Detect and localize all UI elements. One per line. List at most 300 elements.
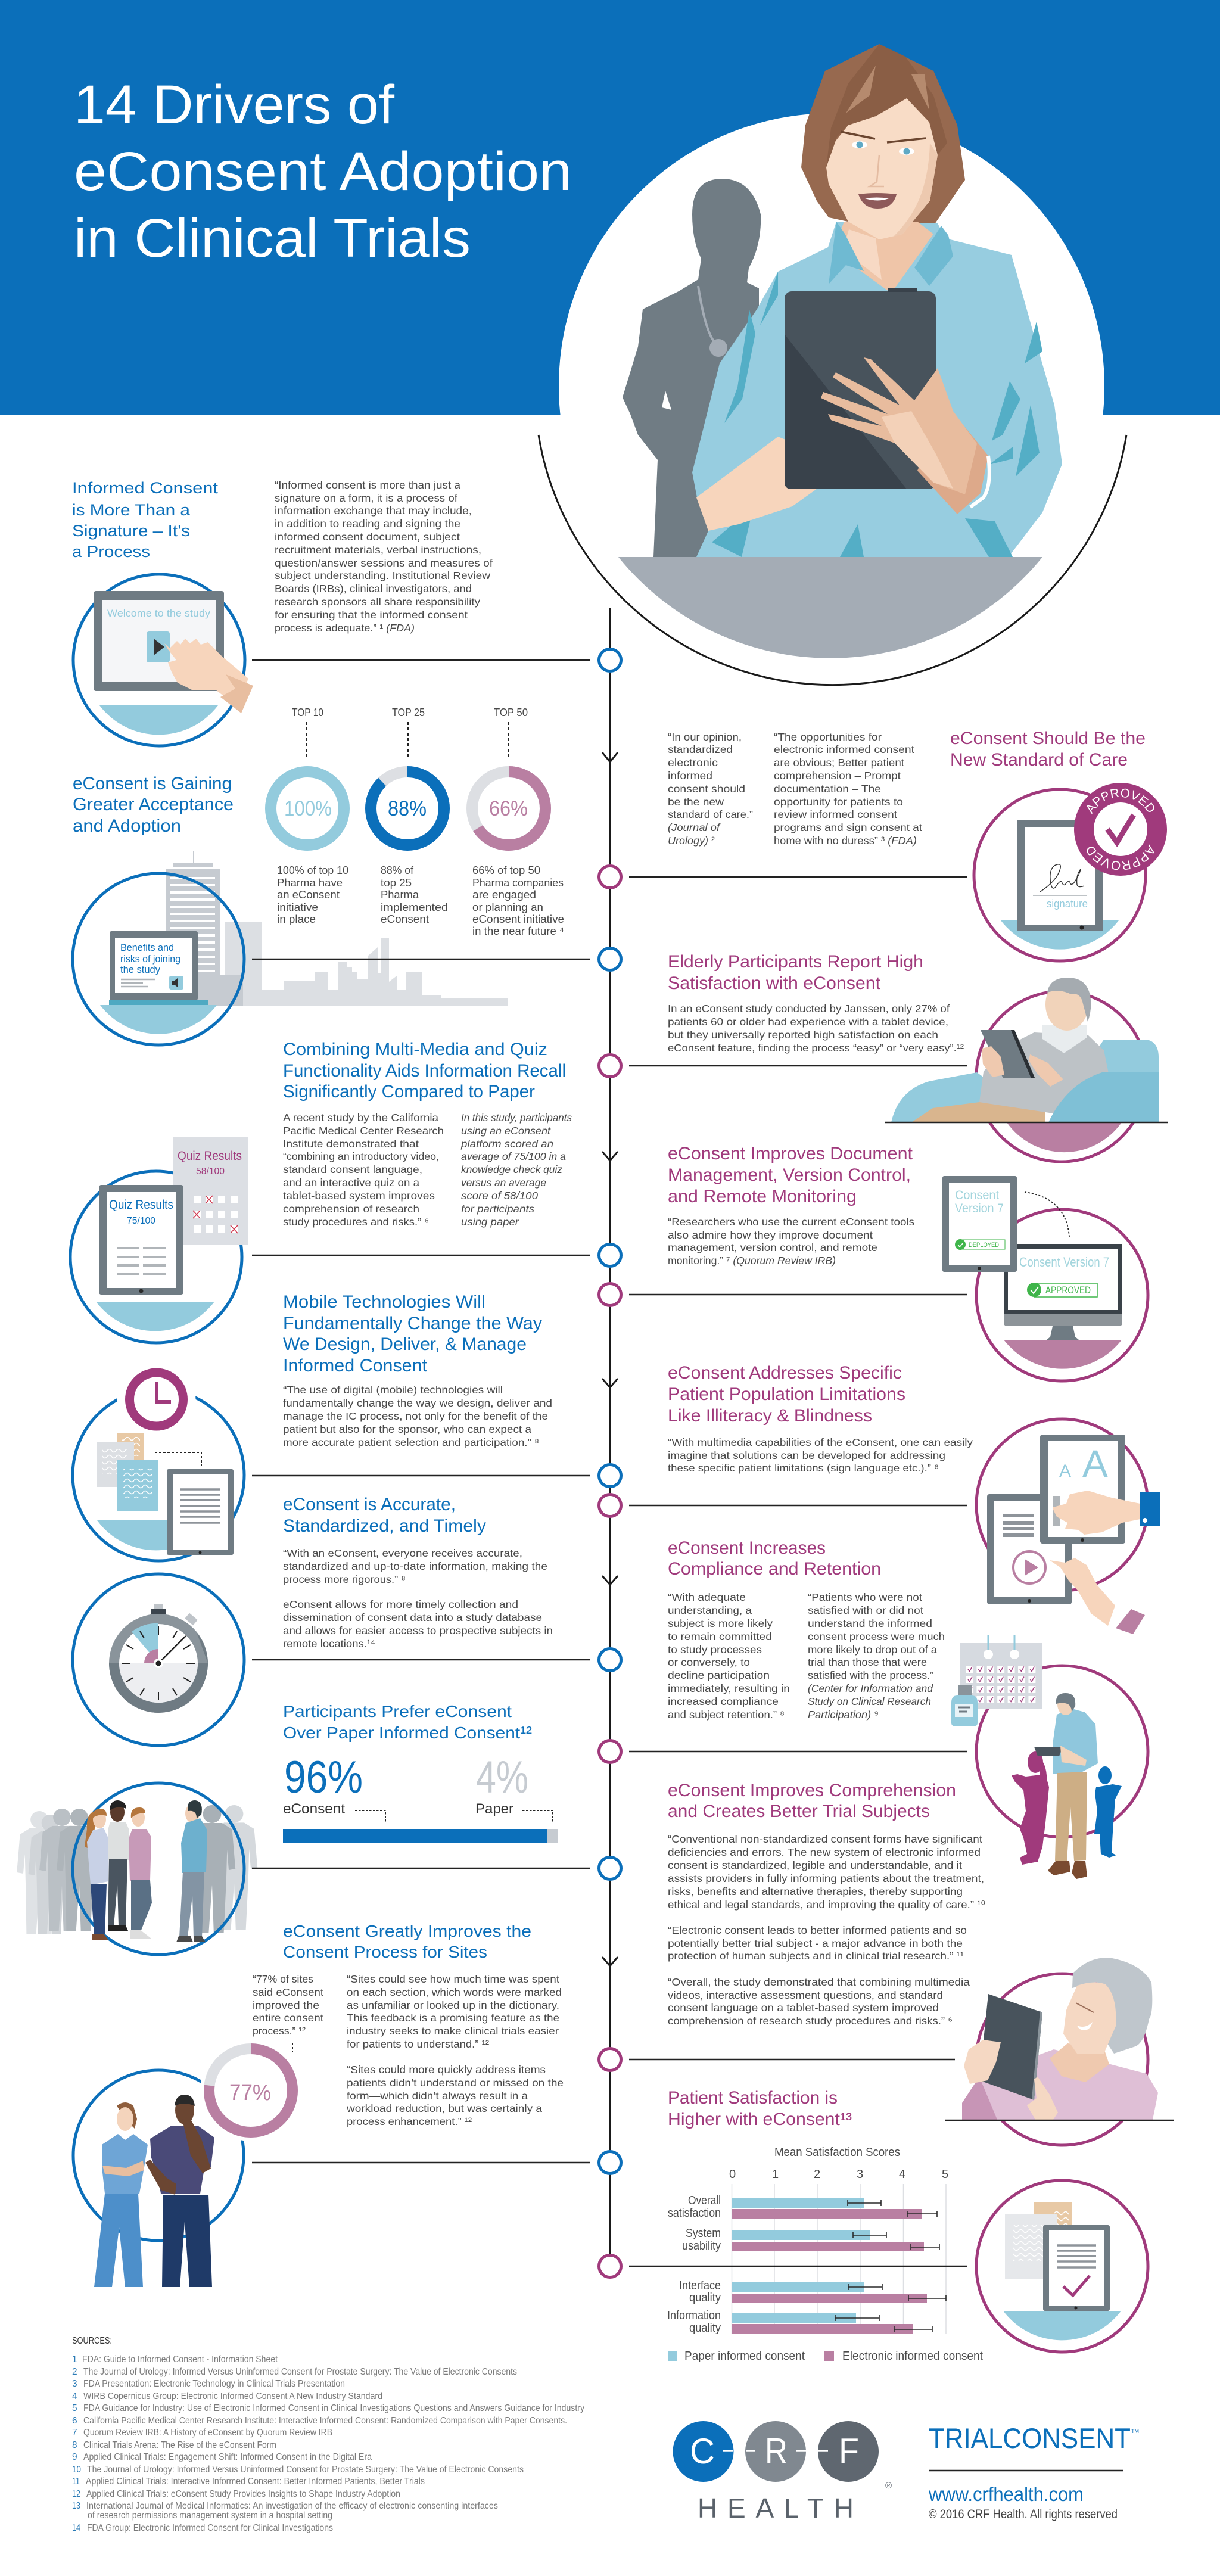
quote column two: Participation) ⁹ <box>808 1709 879 1721</box>
left collar <box>829 222 864 284</box>
heading: eConsent Addresses Specific <box>668 1363 902 1383</box>
panel: gaining acceptance <box>73 707 564 1045</box>
sources list: 14 <box>72 2523 80 2533</box>
heading: Mobile Technologies Will <box>283 1292 485 1312</box>
donut: 100 percent <box>270 772 344 845</box>
quote paragraphs: consent language on a tablet-based system improved <box>668 2002 939 2014</box>
quote column two <box>808 1591 945 1721</box>
donut captions: an eConsent <box>277 888 340 901</box>
node <box>599 2048 621 2071</box>
top labels <box>292 707 528 760</box>
bar chart: mean satisfaction scores: 1 <box>772 2168 779 2181</box>
study text: and an interactive quiz on a <box>283 1177 419 1189</box>
donut captions: or planning an <box>472 901 543 913</box>
77 percent quote: “77% of sites <box>253 1973 313 1985</box>
quote paragraphs: ethical and legal standards, and improving the quality of care.” ¹⁰ <box>668 1899 985 1911</box>
title: in Clinical Trials <box>74 208 471 269</box>
icon: monitor and tablet: Consent <box>955 1189 999 1202</box>
sources list: Clinical Trials Arena: The Rise of the eConsent Form <box>83 2440 276 2450</box>
crowd silhouettes <box>17 1805 257 1934</box>
heading: Signature – It’s <box>72 522 190 540</box>
icon: quiz results: Quiz Results <box>109 1198 173 1212</box>
heading <box>668 1781 956 1821</box>
right iris <box>903 148 910 155</box>
heading: Functionality Aids Information Recall <box>283 1061 566 1081</box>
heading: Patient Population Limitations <box>668 1385 905 1404</box>
icon: quiz results: Quiz Results <box>178 1149 242 1163</box>
hero grey base <box>618 557 1042 658</box>
heading: Greater Acceptance <box>73 795 234 814</box>
heading: Elderly Participants Report High <box>668 952 923 972</box>
quote text: informed consent document, subject <box>275 531 460 543</box>
sources list: 6 <box>72 2416 77 2426</box>
heading <box>668 1363 905 1426</box>
77 percent quote <box>253 1973 323 2054</box>
quote text: information exchange that may include, <box>275 505 472 517</box>
quote paragraphs: deficiencies and errors. The new system of electronic informed <box>668 1846 981 1858</box>
body text: “With an eConsent, everyone receives accurate, <box>283 1547 522 1559</box>
77 percent quote: process.” ¹² <box>253 2025 306 2037</box>
panel: comprehension and better subjects <box>668 1781 1158 2145</box>
sites quotes <box>346 1973 564 2127</box>
quote paragraphs: “Overall, the study demonstrated that combining multimedia <box>668 1976 970 1988</box>
quote column one: “With adequate <box>668 1591 746 1603</box>
body text: patients 60 or older had experience with a tablet device, <box>668 1016 948 1028</box>
study text: standard consent language, <box>283 1163 422 1175</box>
donut: 88 percent: 88% <box>388 797 427 820</box>
eyes and brows <box>841 132 926 142</box>
quote column one: understanding, a <box>668 1604 752 1616</box>
horizontal baseline under older woman <box>945 2120 1174 2121</box>
quote paragraphs: videos, interactive assessment questions, and standard <box>668 1989 943 2001</box>
heading <box>668 2088 852 2129</box>
body text: process more rigorous.” ⁸ <box>283 1573 406 1585</box>
figure: man in grey <box>108 1800 129 1931</box>
donut captions: 100% of top 10 <box>277 864 348 876</box>
body text: eConsent allows for more timely collection and <box>283 1598 518 1610</box>
heading: Participants Prefer eConsent <box>283 1702 512 1721</box>
icon: tablets with hands: A <box>1082 1442 1108 1485</box>
study text: Pacific Medical Center Research <box>283 1125 444 1137</box>
FDA quote: documentation – The <box>774 783 881 795</box>
icon: tablets with hands: A <box>1059 1461 1071 1481</box>
horizontal connector <box>629 1505 967 1506</box>
quote text <box>668 1216 914 1267</box>
icon: signature tablet: signature <box>1047 898 1088 910</box>
bar chart: mean satisfaction scores: Overall <box>688 2194 721 2207</box>
sources list: 13 <box>72 2501 80 2511</box>
icon: circle of people <box>73 1783 244 1955</box>
top labels: TOP 10 <box>292 707 323 718</box>
node <box>599 2152 621 2173</box>
donut: 66 percent <box>472 772 546 845</box>
77 percent quote: entire consent <box>253 2012 323 2024</box>
bar chart: mean satisfaction scores: 2 <box>814 2168 820 2181</box>
heading: Higher with eConsent¹³ <box>668 2110 852 2129</box>
horizontal connector <box>629 2059 955 2060</box>
sources list: 10 <box>72 2465 81 2475</box>
horizontal connector <box>629 1751 967 1752</box>
heading <box>668 1538 881 1579</box>
quote text: management, version control, and remote <box>668 1242 877 1253</box>
heading: Consent Process for Sites <box>283 1943 487 1961</box>
body text: dissemination of consent data into a study database <box>283 1611 542 1623</box>
panel: improves process for sites <box>73 1922 564 2287</box>
TrialConsent brand block: © 2016 CRF Health. All rights reserved <box>929 2507 1118 2521</box>
sites quotes: This feedback is a promising feature as the <box>347 2012 559 2024</box>
bar chart: mean satisfaction scores: 3 <box>857 2168 863 2181</box>
quote text: research sponsors all share responsibility <box>275 596 480 608</box>
77 percent quote: said eConsent <box>253 1986 323 1998</box>
heading <box>283 1292 542 1376</box>
sources list: 8 <box>72 2440 77 2450</box>
bar chart: mean satisfaction scores: satisfaction <box>668 2207 721 2220</box>
horizontal connector <box>252 1868 590 1869</box>
heading: a Process <box>72 543 150 561</box>
sources list: FDA Presentation: Electronic Technology in Clinical Trials Presentation <box>83 2379 345 2389</box>
TrialConsent brand block: TM <box>1131 2428 1139 2434</box>
header banner <box>0 0 1220 415</box>
quote text: recruitment materials, verbal instructions, <box>275 544 481 556</box>
heading: and Creates Better Trial Subjects <box>668 1802 930 1821</box>
italic finding: using paper <box>461 1216 519 1228</box>
icon: monitor and tablet: DEPLOYED <box>969 1242 999 1249</box>
bracelet <box>970 456 989 507</box>
quote column one <box>668 1591 790 1721</box>
quote text: “The use of digital (mobile) technologies will <box>283 1384 503 1396</box>
icon: tablet with hand <box>73 574 253 746</box>
top labels: TOP 25 <box>392 707 425 718</box>
study text: study procedures and risks.” ⁶ <box>283 1216 429 1228</box>
FDA quote: “The opportunities for <box>774 731 882 743</box>
woman hair back <box>801 44 965 226</box>
bar chart: mean satisfaction scores: System <box>686 2227 721 2240</box>
left eye <box>852 141 867 148</box>
stat: 4 percent <box>475 1752 553 1822</box>
panel: informed consent <box>72 479 493 746</box>
italic finding: for participants <box>461 1203 534 1215</box>
sources list: Quorum Review IRB: A History of eConsent by Quorum Review IRB <box>83 2428 332 2438</box>
neck highlight <box>843 229 882 280</box>
node <box>599 1054 621 1077</box>
icon: tablet with hand: Welcome to the study <box>107 608 211 619</box>
heading: eConsent Improves Comprehension <box>668 1781 956 1800</box>
tablet <box>785 291 936 489</box>
preference bar <box>283 1829 558 1843</box>
node <box>599 1649 621 1670</box>
hero white circle <box>559 113 1104 659</box>
heading: Fundamentally Change the Way <box>283 1314 542 1333</box>
icon: elderly man on couch <box>891 978 1159 1162</box>
quote paragraphs: consent is standardized, legible and understandable, and it <box>668 1859 962 1871</box>
horizontal baseline under man <box>885 1122 1168 1123</box>
study text: tablet-based system improves <box>283 1190 435 1202</box>
teeth <box>865 198 889 200</box>
FDA quote: are obvious; Better patient <box>774 757 904 769</box>
heading <box>73 774 234 836</box>
italic finding: knowledge check quiz <box>461 1163 562 1175</box>
panel: mobile technologies <box>73 1292 552 1561</box>
FDA quote: comprehension – Prompt <box>774 770 901 782</box>
title: 14 Drivers of <box>74 74 394 135</box>
quote text: for ensuring that the informed consent <box>275 609 468 621</box>
panel: compliance and retention <box>668 1538 1148 1879</box>
horizontal connector <box>252 1255 590 1256</box>
quote column two: satisfied with or did not <box>808 1604 923 1616</box>
donut captions: Pharma companies <box>472 876 564 889</box>
FDA quote: home with no duress” ³ (FDA) <box>774 835 917 847</box>
figure: nurse <box>94 2102 148 2287</box>
quote column one: or conversely, to <box>668 1656 750 1668</box>
heading: and Remote Monitoring <box>668 1187 857 1206</box>
stat: 96 percent <box>283 1752 385 1822</box>
quote text: also admire how they improve document <box>668 1229 873 1241</box>
horizontal connector <box>629 1294 967 1295</box>
node <box>599 1464 621 1487</box>
urology quote: (Journal of <box>668 822 721 833</box>
horizontal connector <box>629 2266 967 2267</box>
quote text: “Researchers who use the current eConsent tools <box>668 1216 914 1228</box>
quote column two: trial than those that were <box>808 1656 927 1668</box>
quote column two: (Center for Information and <box>808 1682 933 1694</box>
FDA quote: programs and sign consent at <box>774 822 922 833</box>
approved stamp: APPROVED <box>1087 789 1154 814</box>
sources list: Applied Clinical Trials: Engagement Shift: Informed Consent in the Digital Era <box>83 2452 372 2462</box>
donut captions: eConsent <box>381 913 429 925</box>
urology quote: informed <box>668 770 712 782</box>
TrialConsent brand block: TRIALCONSENT <box>929 2422 1131 2454</box>
node <box>599 866 621 888</box>
sources list: Applied Clinical Trials: Interactive Informed Consent: Better Informed Patients, Better Trials <box>86 2477 425 2487</box>
horizontal connector <box>629 1065 967 1066</box>
mouth <box>858 193 897 209</box>
figure: doctor <box>145 2095 214 2287</box>
heading <box>283 1702 532 1742</box>
quote text: subject understanding. Institutional Review <box>275 570 490 581</box>
donut captions: in the near future ⁴ <box>472 925 564 937</box>
FDA quote: electronic informed consent <box>774 743 914 755</box>
stethoscope head <box>709 339 727 357</box>
urology quote: consent should <box>668 783 745 795</box>
study text: Institute demonstrated that <box>283 1138 419 1150</box>
heading <box>72 479 219 561</box>
sources list: FDA Group: Electronic Informed Consent for Clinical Investigations <box>87 2523 333 2533</box>
hair strands <box>826 44 947 167</box>
FDA quote: review informed consent <box>774 808 897 820</box>
horizontal connector <box>252 1475 590 1476</box>
horizontal connector <box>252 959 590 960</box>
sources list: The Journal of Urology: Informed Versus Uninformed Consent for Prostate Surgery: The Value of Electronic Consents <box>83 2367 517 2377</box>
sources list: 3 <box>72 2379 77 2389</box>
sources list: International Journal of Medical Informatics: An investigation of the efficacy of electronic consenting interfaces <box>86 2501 498 2511</box>
donut: 77 percent: 77% <box>229 2080 271 2105</box>
sources list: California Pacific Medical Center Research Institute: Interactive Informed Consent: Randomized Comparison with Paper Consents. <box>83 2416 567 2426</box>
quote text: patient but also for the sponsor, who can expect a <box>283 1423 531 1435</box>
quote text: monitoring.” ⁷ (Quorum Review IRB) <box>668 1255 836 1267</box>
donut captions: Pharma have <box>277 876 343 889</box>
donut captions: 66% of top 50 <box>472 864 540 876</box>
bar chart: mean satisfaction scores: Information <box>667 2309 721 2322</box>
node <box>599 649 621 671</box>
woman face <box>826 98 938 239</box>
tablet shadow <box>785 334 907 489</box>
node <box>599 1244 621 1267</box>
77 percent quote: improved the <box>253 1999 319 2011</box>
quote paragraphs: risks, benefits and alternative therapies, thereby supporting <box>668 1886 963 1897</box>
heading: Patient Satisfaction is <box>668 2088 838 2108</box>
urology quote: standard of care.” <box>668 808 753 820</box>
timeline arrowheads <box>602 752 618 1966</box>
FDA quote <box>774 731 922 847</box>
italic finding: platform scored an <box>460 1138 553 1150</box>
heading <box>668 952 923 993</box>
timeline nodes <box>599 649 621 2277</box>
bar chart: mean satisfaction scores <box>667 2146 948 2335</box>
quote paragraphs: potentially better trial subject - a major advance in both the <box>668 1937 963 1949</box>
donut captions: in place <box>277 913 316 925</box>
sources list: FDA: Guide to Informed Consent - Information Sheet <box>82 2354 278 2365</box>
icon: monitor and tablet: APPROVED <box>1045 1284 1091 1296</box>
quote column two: Study on Clinical Research <box>808 1695 931 1707</box>
quote paragraphs: assists providers in fully informing patients about the treatment, <box>668 1872 984 1884</box>
panel: illiteracy and blindness <box>668 1363 1160 1634</box>
sites quotes: process enhancement.” ¹² <box>347 2115 472 2127</box>
italic finding: versus an average <box>461 1177 546 1189</box>
approved stamp <box>1074 783 1167 876</box>
quote text: imagine that solutions can be developed for addressing <box>668 1449 945 1461</box>
chart legend: Electronic informed consent <box>842 2350 983 2363</box>
node <box>599 1858 621 1879</box>
quote paragraphs: protection of human subjects and in clinical trial research.” ¹¹ <box>668 1950 964 1962</box>
TrialConsent brand block <box>928 2422 1139 2521</box>
italic finding: score of 58/100 <box>461 1190 538 1202</box>
hero illustration: woman with tablet and doctor silhouette <box>539 44 1126 685</box>
sites quotes: workload reduction, but was certainly a <box>346 2102 542 2114</box>
heading: eConsent Improves Document <box>668 1144 913 1163</box>
panel: accurate standardized timely <box>73 1495 553 1746</box>
icon: quiz results: 58/100 <box>196 1166 225 1177</box>
icon: building and tablet: Benefits and <box>120 942 174 953</box>
quote text: signature on a form, it is a process of <box>275 492 458 504</box>
urology quote: be the new <box>668 796 724 808</box>
doctor silhouette <box>623 179 761 557</box>
tablet button <box>888 288 917 292</box>
heading: Over Paper Informed Consent¹² <box>283 1723 532 1742</box>
quote column one: to remain committed <box>668 1631 772 1642</box>
icon: building and tablet: risks of joining <box>120 953 180 965</box>
heading: Combining Multi-Media and Quiz <box>283 1040 547 1059</box>
chart legend: Paper informed consent <box>684 2350 805 2363</box>
right collar <box>914 226 953 286</box>
quote paragraphs: comprehension of research study procedures and risks.” ⁶ <box>668 2015 953 2027</box>
chart legend <box>668 2350 983 2363</box>
sources list: Applied Clinical Trials: eConsent Study Provides Insights to Shape Industry Adoption <box>86 2489 400 2499</box>
donut: 88 percent <box>371 772 444 845</box>
icon: monitor and tablet <box>942 1176 1148 1381</box>
sites quotes: form—which didn’t always result in a <box>347 2090 528 2102</box>
panel: multimedia and quiz <box>70 1040 572 1343</box>
bar chart: mean satisfaction scores: 5 <box>942 2168 948 2181</box>
italic finding <box>460 1112 572 1228</box>
heading: Significantly Compared to Paper <box>283 1082 535 1102</box>
body text: but they universally reported high satisfaction on each <box>668 1029 938 1041</box>
panel: new standard of care <box>668 729 1167 963</box>
body text: eConsent feature, finding the process “easy” or “very easy”.¹² <box>668 1042 964 1054</box>
CRF Health logo: R <box>765 2431 788 2471</box>
body text: remote locations.¹⁴ <box>283 1638 375 1650</box>
hero outer arc <box>539 435 1126 685</box>
heading <box>668 1144 913 1206</box>
horizontal connector <box>252 1659 590 1660</box>
icon: monitor and tablet: Consent Version 7 <box>1019 1255 1109 1270</box>
quote text <box>668 1436 973 1474</box>
sources list: 12 <box>72 2489 80 2499</box>
quote text <box>283 1384 552 1448</box>
donut: 77 percent <box>200 2040 301 2141</box>
heading <box>950 729 1146 770</box>
sources list: 1 <box>72 2354 77 2365</box>
shirt shadow folds <box>709 272 1042 557</box>
body text: In an eConsent study conducted by Janssen, only 27% of <box>668 1003 950 1015</box>
bar chart: mean satisfaction scores: Interface <box>679 2279 721 2292</box>
body text: and allows for easier access to prospective subjects in <box>283 1625 553 1637</box>
sources list: 7 <box>72 2428 77 2438</box>
sites quotes: on each section, which words were marked <box>347 1986 562 1998</box>
sources list: 4 <box>72 2391 77 2401</box>
sites quotes: for patients to understand.” ¹² <box>347 2038 489 2050</box>
panel: participants prefer eConsent <box>17 1702 558 1955</box>
quote text: more accurate patient selection and participation.” ⁸ <box>283 1436 539 1448</box>
donut captions: implemented <box>381 901 448 913</box>
bar chart: mean satisfaction scores: Mean Satisfaction Scores <box>774 2146 900 2159</box>
node <box>599 1283 621 1306</box>
bar chart: mean satisfaction scores: 4 <box>899 2168 905 2181</box>
quote text: question/answer sessions and measures of <box>275 557 493 569</box>
heading: Satisfaction with eConsent <box>668 973 881 993</box>
approved stamp: APPROVED <box>1087 845 1154 870</box>
node <box>599 1494 621 1517</box>
icon: stopwatch <box>73 1574 244 1746</box>
right forearm <box>917 405 988 514</box>
heading <box>283 1495 486 1536</box>
bar chart: mean satisfaction scores: quality <box>689 2291 721 2304</box>
quote paragraphs <box>668 1833 985 2027</box>
sources list <box>72 2336 584 2533</box>
icon: circle with clinicians <box>73 2070 244 2241</box>
quote column one: immediately, resulting in <box>668 1682 790 1694</box>
bar chart: mean satisfaction scores: usability <box>682 2239 721 2253</box>
donut captions: are engaged <box>472 888 536 901</box>
heading: Compliance and Retention <box>668 1559 881 1579</box>
sources list: 2 <box>72 2367 77 2377</box>
body text <box>668 1003 964 1054</box>
title: eConsent Adoption <box>74 141 572 202</box>
quote column two: understand the informed <box>808 1617 932 1629</box>
icon: tablets with hands <box>976 1419 1160 1634</box>
sources list: SOURCES: <box>72 2336 112 2346</box>
face shading <box>894 143 938 237</box>
donut captions: 88% of <box>381 864 414 876</box>
quote text: “Informed consent is more than just a <box>275 479 460 491</box>
study text: A recent study by the California <box>283 1112 438 1124</box>
heading: eConsent Increases <box>668 1538 826 1558</box>
stat: 96 percent: eConsent <box>283 1801 345 1817</box>
stat: 4 percent: 4% <box>476 1752 528 1803</box>
skyline <box>225 922 508 1006</box>
italic finding: average of 75/100 in a <box>461 1150 566 1162</box>
sources list: WIRB Copernicus Group: Electronic Informed Consent A New Industry Standard <box>83 2391 382 2401</box>
heading: eConsent Greatly Improves the <box>283 1922 531 1940</box>
